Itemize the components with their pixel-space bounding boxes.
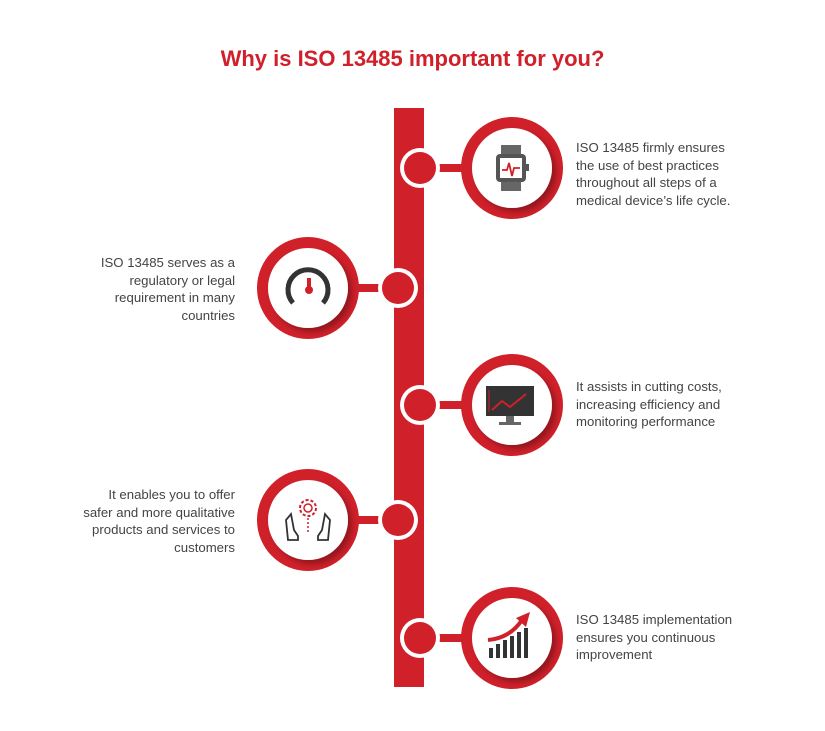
vertical bar [394,108,424,687]
title: Why is ISO 13485 important for you? [221,46,604,71]
text 5: ensures you continuous [576,630,715,644]
text 4 [83,487,235,554]
text 3: increasing efficiency and [576,396,720,412]
text 3: monitoring performance [576,414,715,429]
text 1: throughout all steps of a [576,175,717,190]
text 1: the use of best practices [576,158,719,172]
text 4: products and services to [92,522,235,537]
node 3 [400,354,563,456]
node 4 [257,469,418,571]
text 4: customers [174,540,235,554]
text 2: ISO 13485 serves as a [101,255,235,270]
text 2: requirement in many [115,290,235,305]
icon: hands with bulb [286,500,330,540]
text 1: ISO 13485 firmly ensures [576,140,725,155]
text 4: safer and more qualitative [83,504,235,520]
text 1: medical device’s life cycle. [576,192,730,208]
text 3 [576,379,722,429]
node 1 [400,117,563,219]
node 2 [257,237,418,339]
icon: growth bars [488,612,530,658]
text 2 [101,255,235,322]
text 1 [576,140,730,208]
text 5: ISO 13485 implementation [576,612,732,627]
text 5 [576,612,732,662]
text 4: It enables you to offer [108,487,235,502]
icon: monitor chart [486,386,534,425]
node 5 [400,587,563,689]
text 2: countries [181,308,235,322]
text 5: improvement [576,647,652,662]
icon: smartwatch [496,145,529,191]
text 2: regulatory or legal [129,272,235,288]
icon: gauge [288,270,328,303]
text 3: It assists in cutting costs, [576,379,722,394]
